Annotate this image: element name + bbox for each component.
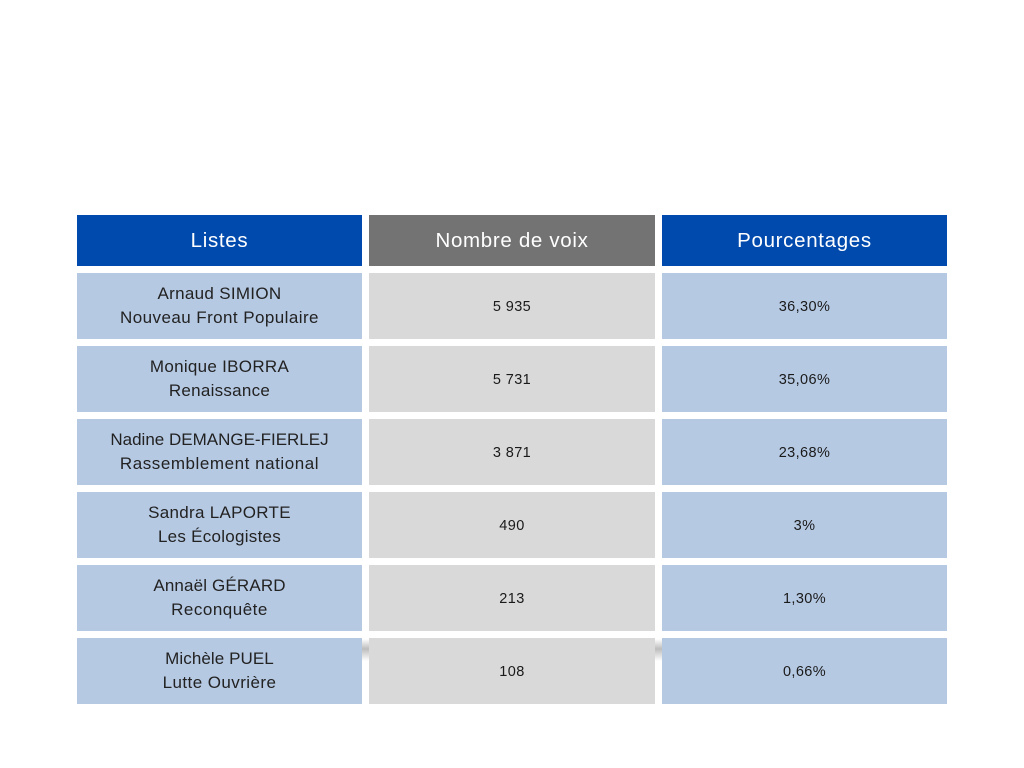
row 2 list name: Monique IBORRA [150, 357, 289, 376]
row 1 list name: Nouveau Front Populaire [120, 308, 319, 327]
row 1 votes: 5 935 [493, 299, 531, 315]
row 5 list name [77, 565, 362, 631]
row 6 votes [369, 638, 655, 704]
row 2 votes: 5 731 [493, 372, 531, 388]
row 6 list name: Michèle PUEL [165, 649, 274, 668]
header: Nombre de voix: Nombre de voix [435, 228, 589, 252]
row 2 votes [369, 346, 655, 412]
header: Nombre de voix [369, 215, 655, 266]
row 4 list name: Sandra LAPORTE [148, 503, 291, 522]
row 3 percentage [662, 419, 947, 485]
row 6 list name [77, 638, 362, 704]
row 2 list name [77, 346, 362, 412]
row 4 votes [369, 492, 655, 558]
row 5 percentage [662, 565, 947, 631]
header: Pourcentages [662, 215, 947, 266]
row 6 votes: 108 [499, 664, 525, 680]
row 6 percentage: 0,66% [783, 664, 826, 680]
row 3 list name: Rassemblement national [120, 454, 319, 473]
header: Listes [77, 215, 362, 266]
row 3 votes: 3 871 [493, 445, 531, 461]
row 4 percentage [662, 492, 947, 558]
row 4 list name [77, 492, 362, 558]
header: Pourcentages: Pourcentages [737, 228, 872, 252]
row 1 votes [369, 273, 655, 339]
row 2 percentage [662, 346, 947, 412]
row 4 votes: 490 [499, 518, 525, 534]
row 1 list name [77, 273, 362, 339]
row 1 percentage: 36,30% [779, 299, 830, 315]
row 6 list name: Lutte Ouvrière [163, 673, 276, 692]
row 1 percentage [662, 273, 947, 339]
row 3 list name [77, 419, 362, 485]
row 3 list name: Nadine DEMANGE-FIERLEJ [110, 430, 329, 449]
row 5 percentage: 1,30% [783, 591, 826, 607]
header: Listes: Listes [191, 228, 248, 252]
row 3 percentage: 23,68% [779, 445, 830, 461]
row 4 percentage: 3% [794, 518, 815, 534]
row 5 list name: Reconquête [171, 600, 268, 619]
row 1 list name: Arnaud SIMION [158, 284, 281, 303]
row 6 percentage [662, 638, 947, 704]
row 2 percentage: 35,06% [779, 372, 830, 388]
row 2 list name: Renaissance [169, 381, 270, 400]
row 4 list name: Les Écologistes [158, 527, 281, 546]
row 5 list name: Annaël GÉRARD [153, 576, 286, 595]
row 5 votes: 213 [499, 591, 525, 607]
row 3 votes [369, 419, 655, 485]
row 5 votes [369, 565, 655, 631]
